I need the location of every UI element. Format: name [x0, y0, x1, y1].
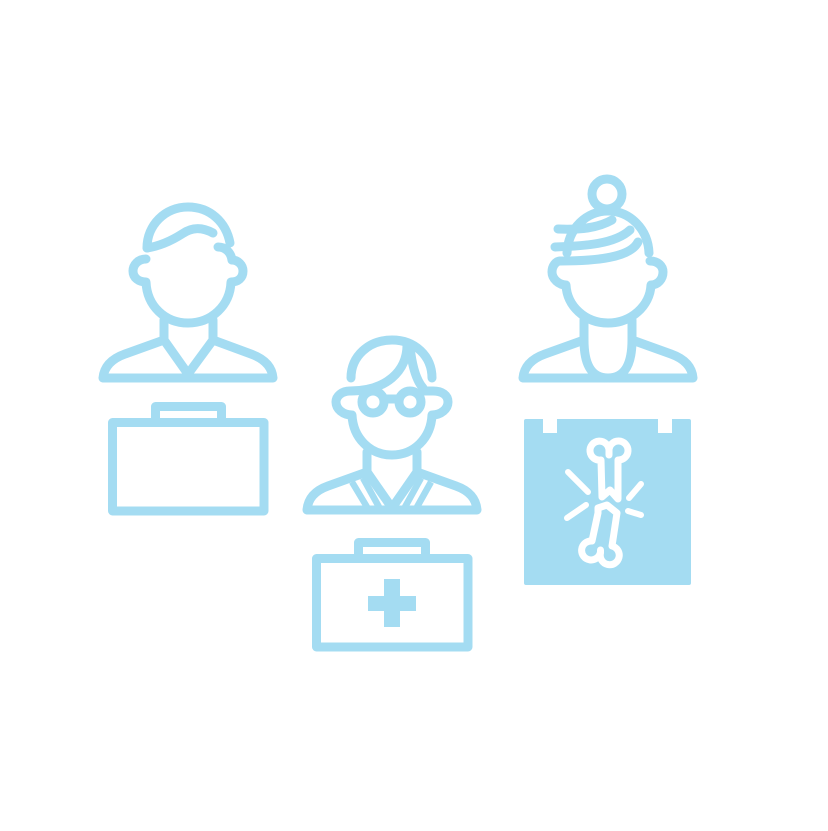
doctor outline: [307, 340, 477, 510]
lower bone: [582, 505, 619, 565]
upper bone: [590, 441, 628, 499]
icon: x-ray sheet with broken bone: [524, 419, 691, 585]
person: doctor with glasses: [307, 340, 477, 510]
case outline: [316, 542, 468, 647]
coat lapels: [352, 478, 431, 507]
fracture sparks: [567, 472, 641, 518]
medical cross: [368, 579, 416, 627]
x-ray sheet: [524, 419, 691, 585]
person: man with side-swept hair: [103, 207, 273, 378]
icon: medical case: [316, 542, 468, 647]
icon: briefcase: [112, 406, 264, 511]
person: woman with bun: [523, 179, 693, 378]
